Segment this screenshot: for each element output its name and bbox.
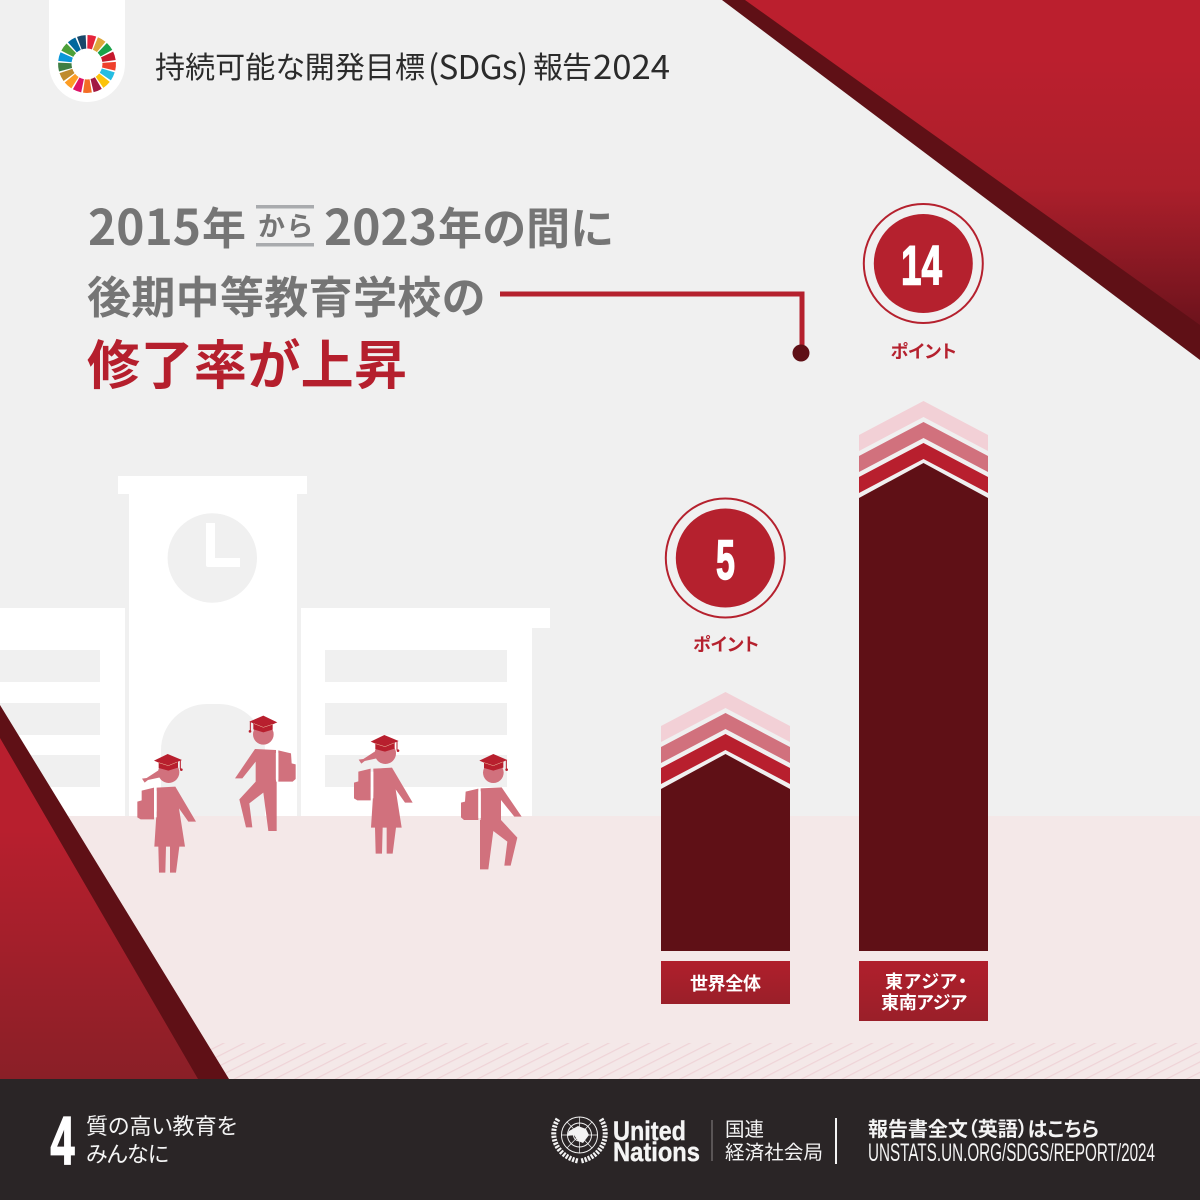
goal name <box>86 1109 237 1169</box>
divider <box>712 1120 713 1161</box>
report title: 報告 <box>533 43 592 87</box>
icon: SDG wheel <box>56 33 118 95</box>
United Nations wordmark: Nations <box>613 1137 700 1167</box>
report link <box>868 1113 1155 1167</box>
value badge: 14 points: ポイント <box>890 338 956 364</box>
figure: boy 2 <box>461 754 522 869</box>
United Nations wordmark <box>613 1116 700 1167</box>
report title: 持続可能な開発目標 <box>155 43 425 87</box>
label: world <box>661 961 790 1004</box>
value badge: 5 points: 5 <box>716 528 735 591</box>
bar: east and southeast asia <box>859 401 988 951</box>
goal name: 質の高い教育を <box>86 1109 237 1141</box>
figure: girl 1 <box>137 754 196 873</box>
report link: 報告書全文（英語）はこちら <box>868 1113 1099 1142</box>
headline: 2015 <box>88 189 201 260</box>
headline: 後期中等教育学校の <box>87 262 485 326</box>
label: world: 世界全体 <box>690 970 761 996</box>
footer bar <box>0 1079 1200 1200</box>
department name <box>725 1113 823 1165</box>
goal number: 4 <box>50 1103 75 1179</box>
top right red triangle <box>722 0 1200 360</box>
bar: world <box>661 692 790 951</box>
figure: girl 2 <box>354 735 413 854</box>
value badge: 5 points <box>666 498 785 657</box>
icon: UN emblem <box>554 1117 605 1161</box>
label: east and southeast asia: 東アジア・ <box>885 968 967 994</box>
report title <box>155 41 670 89</box>
students <box>137 716 522 873</box>
logo tab with SDG wheel <box>49 0 125 102</box>
figure: boy 1 <box>235 716 296 831</box>
report title: 2024 <box>593 41 670 89</box>
bottom left red triangle <box>0 705 229 1079</box>
label: east and southeast asia: 東南アジア <box>881 989 968 1015</box>
headline: 年 <box>202 193 246 257</box>
badge: から: から <box>258 205 312 244</box>
connector line <box>500 294 810 362</box>
value badge: 14 points: 14 <box>901 234 942 296</box>
headline: 修了率が上昇 <box>87 324 407 400</box>
headline <box>87 189 613 400</box>
value badge: 5 points: ポイント <box>693 631 759 657</box>
label: east and southeast asia <box>859 961 988 1021</box>
value badge: 14 points <box>864 204 983 364</box>
headline: 2023 <box>324 189 437 260</box>
headline: 年の間に <box>438 193 613 257</box>
department name: 経済社会局 <box>725 1136 823 1165</box>
ground band <box>0 816 1200 1079</box>
school building <box>0 476 550 816</box>
divider <box>835 1118 837 1164</box>
department name: 国連 <box>725 1113 764 1142</box>
report title: (SDGs) <box>428 41 528 89</box>
United Nations wordmark: United <box>613 1116 686 1146</box>
goal name: みんなに <box>86 1137 169 1169</box>
